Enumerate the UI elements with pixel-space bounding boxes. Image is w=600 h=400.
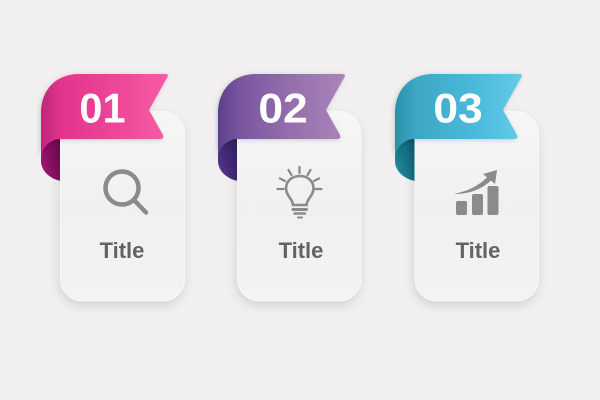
number: 03: 03 [433, 86, 483, 132]
card title: 02: Title [279, 238, 323, 263]
number: 01: 01 [79, 84, 126, 132]
icon: magnifying glass [106, 172, 146, 212]
card body: 02 [238, 112, 361, 301]
panel: card 03 [395, 74, 538, 301]
ribbon: 03 [395, 74, 522, 160]
card title: 01: Title [100, 238, 144, 263]
ribbon: 02 [218, 74, 345, 160]
icon: growth chart [454, 170, 498, 215]
number: 02: 02 [258, 86, 308, 132]
ribbon fold: 03 [395, 125, 415, 181]
card body: 01 [60, 112, 184, 301]
icon: light bulb [278, 167, 322, 218]
ribbon: 01 [41, 74, 168, 160]
card body: 03 [415, 112, 538, 301]
ribbon fold: 02 [218, 125, 238, 181]
panel: card 02 [218, 74, 361, 301]
ribbon fold: 01 [41, 125, 61, 181]
panel: card 01 [41, 74, 184, 301]
card title: 03: Title [456, 238, 500, 263]
